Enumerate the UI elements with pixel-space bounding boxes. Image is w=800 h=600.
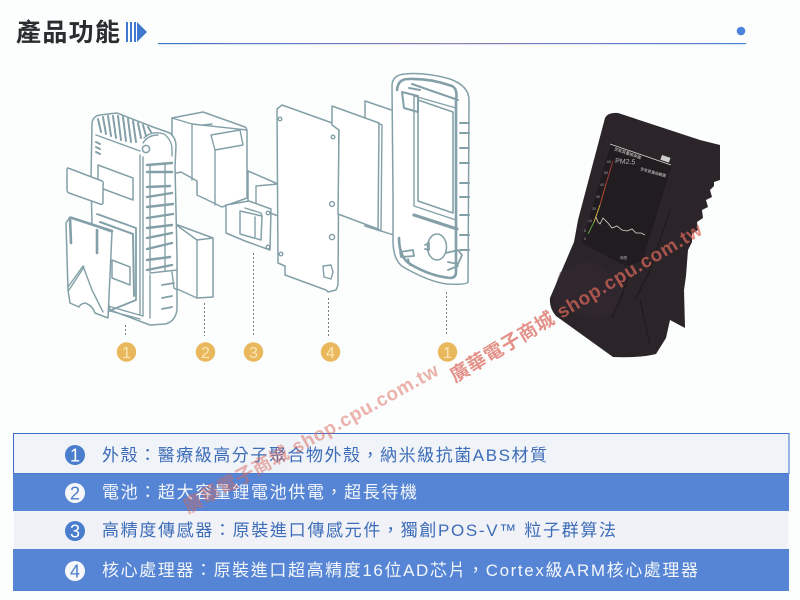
screen: 空氣質量指數圖	[640, 166, 667, 178]
part: circuit board	[277, 105, 339, 292]
row 2: 2	[70, 484, 80, 504]
trend line	[596, 217, 645, 235]
screen: PM2.5	[615, 158, 636, 166]
screen: 30	[596, 195, 600, 199]
part: clip	[66, 217, 112, 318]
callout 2	[196, 342, 215, 362]
screen: 60	[607, 160, 611, 164]
row 3	[14, 511, 788, 549]
header rule	[158, 43, 746, 44]
exploded diagram	[66, 74, 469, 336]
row 4: 4	[70, 562, 80, 582]
row 4	[13, 549, 789, 591]
watermark upper: 廣華電子商城 shop.cpu.com.tw	[446, 218, 706, 387]
row 3: 3	[70, 522, 80, 542]
vent ridges	[98, 116, 151, 142]
part: rear shell	[91, 113, 177, 325]
product photo: device in dark case	[550, 113, 720, 357]
side fins	[147, 163, 177, 318]
row 1	[14, 434, 789, 474]
row 2	[13, 474, 789, 511]
feature table	[13, 434, 789, 591]
row 1: 1	[70, 446, 80, 466]
callout 1 left: 1	[122, 345, 131, 362]
part: sensor	[226, 171, 278, 250]
callout 3: 3	[249, 345, 258, 362]
screen: 20	[592, 207, 596, 211]
part: battery block	[172, 112, 247, 298]
callout 4: 4	[326, 345, 335, 362]
callout 1 left	[117, 342, 136, 362]
screen: 5	[584, 229, 586, 233]
callout 1 right	[438, 342, 457, 362]
part: stick-on label	[67, 168, 103, 204]
screen: 時間	[620, 255, 628, 260]
row 2: 電池：超大容量鋰電池供電，超長待機	[102, 483, 417, 502]
callout 4	[321, 342, 340, 362]
part: display layers	[332, 101, 415, 241]
callout 3	[244, 342, 263, 362]
screen	[582, 143, 672, 266]
screen: 10	[588, 219, 592, 223]
screen: 0	[584, 237, 586, 241]
title: 產品功能	[16, 19, 120, 47]
case body	[550, 113, 720, 357]
screen: 50	[604, 171, 608, 175]
row 1: 外殼：醫療級高分子聚合物外殼，納米級抗菌ABS材質	[102, 446, 547, 465]
icon: title arrow	[126, 22, 147, 42]
part: front frame	[392, 74, 469, 284]
watermark lower: 廣華電子商城 shop.cpu.com.tw	[179, 359, 443, 518]
screen: 空氣質量檢測儀	[614, 145, 642, 160]
callout 2: 2	[201, 345, 210, 362]
callout 1 right: 1	[443, 345, 452, 362]
scale bar	[606, 161, 613, 184]
leader lines	[126, 253, 446, 336]
header dot	[737, 27, 745, 35]
screen: 40	[600, 183, 604, 187]
row 4: 核心處理器：原裝進口超高精度16位AD芯片，Cortex級ARM核心處理器	[102, 561, 698, 580]
row 3: 高精度傳感器：原裝進口傳感元件，獨創POS-V™ 粒子群算法	[102, 520, 616, 540]
